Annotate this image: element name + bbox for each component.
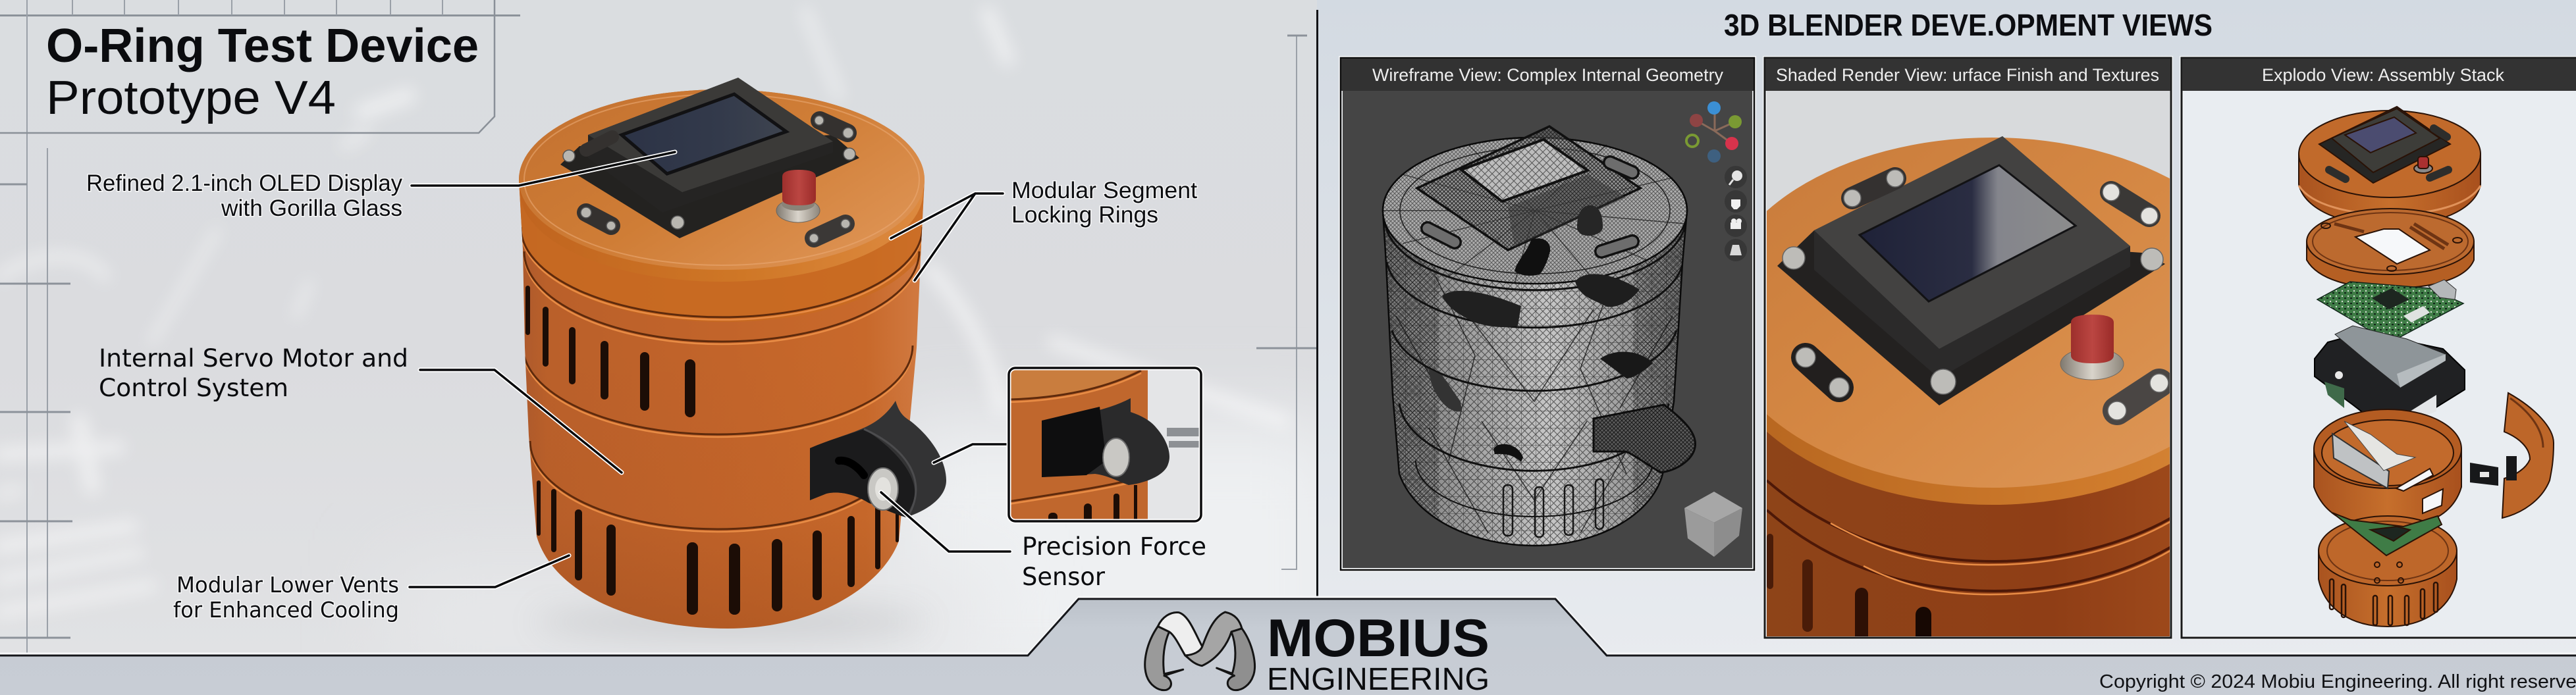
shaded render [1767,91,2170,636]
label: lower vents [173,572,399,623]
leader: servo motor [420,370,622,473]
exploded: side shell [2502,393,2554,518]
upper vent slots [525,286,695,417]
device: main photo of orange cylinder [514,78,946,639]
mounting clips [586,120,847,238]
shaded body [1767,432,2170,636]
shaded clips [1806,178,2159,411]
label: force sensor: Sensor [1022,563,1106,591]
logo: wordmark: MOBIUS [1267,609,1489,668]
orientation cube [1684,492,1742,557]
label: servo motor: Internal Servo Motor and [99,344,408,373]
grooves [521,227,923,532]
viewport tool icons [1725,166,1747,261]
title: Prototype V4 [46,72,336,124]
bolts [563,116,855,243]
label: OLED display [86,170,402,221]
logo: Mobius mark [1145,612,1254,690]
exploded header: Explodo View: Assembly Stack [2262,65,2504,85]
background: right panel [1317,0,2576,658]
label: lower vents: Modular Lower Vents [176,572,399,598]
exploded: PCB [2317,280,2463,342]
leader: OLED display [412,152,675,186]
shaded top face [1767,415,2170,505]
wireframe internal parts [1429,238,1653,462]
shaded header: Shaded Render View: urface Finish and Textures [1776,65,2159,85]
divider between main photo and views [1316,10,1318,599]
top face chamfer [685,190,923,282]
device shadow [533,605,928,639]
display bezel [588,78,833,213]
device body [514,86,928,632]
label: locking rings: Locking Rings [1011,202,1158,228]
exploded: black clip pieces [2470,456,2517,486]
leader: inset to bracket [934,444,1009,463]
label: servo motor: Control System [99,374,288,402]
inset: force sensor close-up [1009,368,1201,527]
lower vent slots [537,480,899,615]
wireframe sensor bump [1594,405,1696,473]
label: OLED display: Refined 2.1-inch OLED Display [86,170,402,196]
leader: force sensor [881,492,1010,552]
leader: lower vents [410,555,569,587]
wireframe header [1341,59,1754,91]
navigation gizmo [1686,101,1742,163]
logo: wordmark [1267,609,1489,695]
label: servo motor [99,344,408,402]
panel: exploded view [2182,58,2576,638]
shaded screen [1860,165,2076,301]
footer band [0,600,2576,695]
shaded button [2060,315,2124,380]
exploded: lid [2299,107,2481,226]
exploded: base [2319,513,2457,627]
OLED screen [622,94,786,174]
shaded display plate [1777,230,2165,405]
wireframe model [1380,126,1696,550]
shaded header [1765,59,2170,91]
copyright: Copyright © 2024 Mobiu Engineering. All right reserved [2099,671,2576,692]
label: locking rings: Modular Segment [1011,178,1197,203]
leader: locking rings [891,193,1003,280]
label: OLED display: with Gorilla Glass [221,195,402,221]
shaded bezel [1814,136,2130,378]
title: O-Ring Test Device [46,20,479,72]
exploded: ring [2307,209,2474,288]
panel: shaded render view [1763,56,2173,640]
label: lower vents: for Enhanced Cooling [173,597,399,623]
label: locking rings [1011,178,1197,228]
wireframe header: Wireframe View: Complex Internal Geometry [1372,65,1723,85]
precision force sensor bracket [810,401,946,517]
title [46,20,479,124]
exploded header [2182,59,2576,91]
panel: wireframe view [1341,58,1754,570]
top face [519,90,925,270]
heading: views: 3D BLENDER DEVE.OPMENT VIEWS [1724,8,2213,42]
label: force sensor [1022,532,1206,591]
red push button [776,170,820,222]
wireframe slots [1503,479,1603,537]
title box outline [0,0,495,133]
exploded: battery and servo block [2315,326,2465,427]
label: force sensor: Precision Force [1022,532,1206,561]
shaded bolts [1783,170,2168,420]
exploded: middle ring [2314,409,2461,528]
footer outline [0,597,2576,656]
background: left photo panel [0,17,1316,653]
display base plate [560,135,859,238]
